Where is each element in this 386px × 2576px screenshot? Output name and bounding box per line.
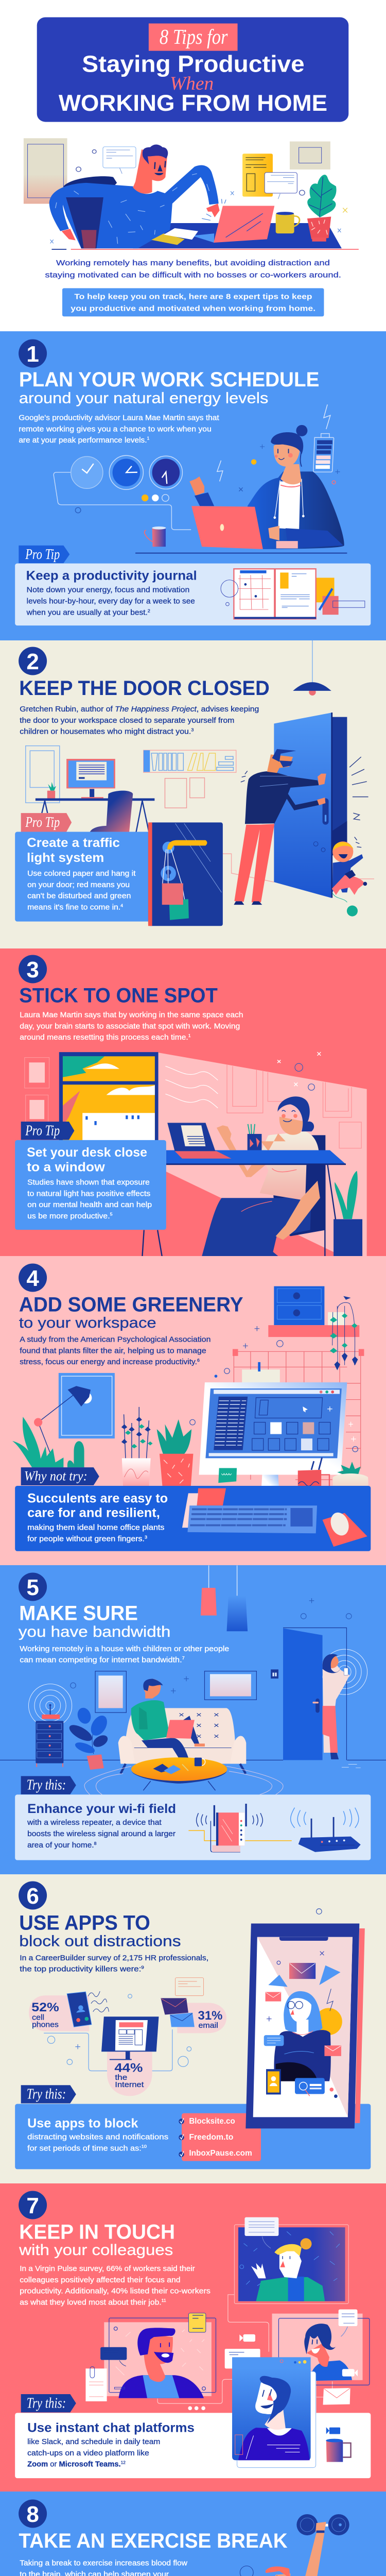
pro tip panel 2 bbox=[15, 813, 223, 926]
stat: cell phones 52%: 52% bbox=[31, 2001, 59, 2014]
tip panel 6: distracting websites and notifications bbox=[27, 2133, 168, 2141]
section 8 bbox=[0, 2492, 386, 2576]
number badge 8 bbox=[19, 2500, 47, 2528]
body text 7 bbox=[20, 2265, 210, 2307]
number badge 4 bbox=[19, 1263, 47, 1292]
body text 8 bbox=[20, 2559, 188, 2576]
flag: pro tip: Pro Tip bbox=[25, 1122, 60, 1139]
tip panel 4: care for and resilient, bbox=[27, 1506, 160, 1520]
pro tip panel 3: on our mental health and can help bbox=[27, 1201, 152, 1209]
body text 7: colleagues positively affected their focus and bbox=[20, 2276, 181, 2284]
number badge 2: 2 bbox=[26, 649, 39, 674]
body text 2: the door to your workspace closed to separate yourself from bbox=[20, 717, 234, 725]
icon: door hanger bbox=[148, 822, 223, 926]
pro tip panel 1 bbox=[15, 546, 371, 625]
section 2 bbox=[0, 640, 386, 948]
tip panel 6: 10 bbox=[142, 2144, 147, 2149]
illustration: computer desk bbox=[199, 1286, 369, 1507]
tip panel 6 bbox=[15, 2085, 371, 2169]
list: blocking apps bbox=[179, 2113, 261, 2161]
illustration: woman at laptop bbox=[135, 404, 347, 554]
subheading 1: around your natural energy levels bbox=[19, 389, 268, 406]
heading 1: PLAN YOUR WORK SCHEDULE bbox=[19, 368, 319, 391]
tip panel 4: making them ideal home office plants bbox=[27, 1524, 165, 1532]
header bbox=[24, 17, 359, 316]
icon: video camera and mug bbox=[326, 2427, 351, 2462]
number badge 1: 1 bbox=[26, 342, 39, 367]
subheading 5: you have bandwidth bbox=[19, 1623, 170, 1640]
number badge 1 bbox=[19, 339, 47, 368]
illustration: clocks and wire bbox=[54, 455, 191, 547]
tip panel 5: 8 bbox=[94, 1841, 97, 1846]
pro tip panel 2: can't be disturbed and green bbox=[27, 892, 131, 901]
number badge 8: 8 bbox=[26, 2502, 39, 2527]
flag: pro tip: Pro Tip bbox=[25, 546, 60, 563]
body text 5: Working remotely in a house with children or other people bbox=[20, 1645, 229, 1653]
flag: try this: Try this: bbox=[27, 1777, 66, 1793]
title panel bbox=[37, 17, 348, 122]
illustration: living room bbox=[0, 1598, 386, 1794]
tip panel 5: Enhance your wi-fi field bbox=[27, 1802, 176, 1816]
body text 3: 1 bbox=[188, 1033, 191, 1038]
tip panel 5: with a wireless repeater, a device that bbox=[27, 1819, 162, 1827]
pro tip panel 1: 2 bbox=[148, 608, 150, 613]
pro tip panel 2: light system bbox=[27, 851, 104, 865]
illustration: man at laptop bbox=[24, 138, 359, 250]
body text 2: Gretchen Rubin, author of The Happiness Project , advises keeping bbox=[20, 705, 259, 714]
stat: cell phones 52% bbox=[29, 1991, 109, 2031]
illustration: man lifting dumbbells bbox=[189, 2514, 349, 2576]
body text 3: Laura Mae Martin says that by working in the same space each bbox=[20, 1011, 243, 1020]
tip panel 7 bbox=[15, 2357, 371, 2478]
list: blocking apps: Blocksite.co bbox=[189, 2117, 235, 2126]
tip panel 5: boosts the wireless signal around a larger bbox=[27, 1830, 176, 1838]
body text 6 bbox=[20, 1954, 208, 1974]
section 7 bbox=[0, 2183, 386, 2492]
tip panel 6: Use apps to block bbox=[27, 2116, 138, 2131]
body text 3: day, your brain starts to associate that spot with work. Moving bbox=[20, 1023, 240, 1031]
tip panel 7: like Slack, and schedule in daily team bbox=[27, 2438, 160, 2446]
body text 5: can mean competing for internet bandwidth. bbox=[20, 1656, 163, 1664]
intro text: staying motivated can be difficult with no bosses or co-workers around. bbox=[45, 271, 341, 279]
tip panel 6: for set periods of time such as: bbox=[27, 2144, 128, 2153]
tip panel 4: for people without green fingers. bbox=[27, 1535, 133, 1544]
body text 7: productivity. Additionally, 40% listed their co-workers bbox=[20, 2287, 210, 2295]
subheading 6: block out distractions bbox=[19, 1933, 181, 1950]
pro tip panel 2: Use colored paper and hang it bbox=[27, 870, 136, 878]
illustration: window and woman at desk bbox=[25, 1052, 367, 1256]
body text 4: 6 bbox=[197, 1358, 200, 1363]
pro tip panel 1: levels hour-by-hour, every day for a week to see bbox=[27, 598, 195, 606]
tip panel 4: 3 bbox=[145, 1535, 148, 1539]
illustration: child and dog bbox=[332, 837, 367, 917]
number badge 3: 3 bbox=[26, 957, 39, 982]
icon: hanging lamp bbox=[293, 640, 331, 696]
heading 4: ADD SOME GREENERY bbox=[19, 1293, 243, 1316]
intro text bbox=[45, 259, 341, 279]
number badge 5 bbox=[19, 1572, 47, 1601]
number badge 6: 6 bbox=[26, 1884, 39, 1909]
pro tip panel 2: Create a traffic bbox=[27, 836, 120, 850]
illustration: blonde colleague video tile bbox=[234, 2217, 348, 2303]
body text 6: 9 bbox=[141, 1965, 144, 1970]
section 5 bbox=[0, 1565, 386, 1874]
body text 2: 3 bbox=[191, 727, 194, 732]
stat: cell phones 52%: cell bbox=[32, 2013, 44, 2022]
subheading 7: with your colleagues bbox=[19, 2242, 173, 2259]
body text 5: 7 bbox=[182, 1656, 185, 1660]
body text 3 bbox=[20, 1011, 243, 1042]
flag: why not try: Why not try: bbox=[24, 1468, 87, 1483]
icon: wi-fi repeater bbox=[188, 1804, 292, 1852]
pro tip panel 3: to a window bbox=[27, 1160, 105, 1175]
flag: try this: Try this: bbox=[27, 2395, 66, 2411]
icon: notebook bbox=[221, 569, 365, 619]
title panel: Staying Productive bbox=[82, 50, 305, 77]
heading 8: TAKE AN EXERCISE BREAK bbox=[19, 2530, 288, 2552]
illustration: colleague on tablet bbox=[232, 2357, 316, 2468]
pro tip panel 1: Note down your energy, focus and motivation bbox=[27, 586, 189, 595]
body text 3: around means resetting this process each time. bbox=[20, 1033, 174, 1042]
number badge 7 bbox=[19, 2191, 47, 2219]
tip panel 5: area of your home. bbox=[27, 1841, 89, 1850]
body text 8: Taking a break to exercise increases blood flow bbox=[20, 2559, 188, 2567]
tip panel 7: catch-ups on a video platform like bbox=[27, 2449, 149, 2458]
pro tip panel 1: when you are usually at your best. bbox=[27, 609, 138, 617]
tip panel 7: Zoom or Microsoft Teams. bbox=[27, 2461, 119, 2469]
stat: cell phones 52%: phones bbox=[32, 2021, 59, 2029]
body text 1: 1 bbox=[147, 436, 150, 441]
title panel: When bbox=[170, 73, 214, 94]
section 6 bbox=[0, 1874, 386, 2183]
stat: internet 44%: 44% bbox=[114, 2061, 143, 2075]
stat: internet 44%: Internet bbox=[115, 2081, 144, 2089]
illustration: phone with woman bbox=[245, 1909, 365, 2128]
tip panel 7: 12 bbox=[121, 2460, 126, 2465]
body text 4 bbox=[20, 1336, 210, 1366]
body text 6: the top productivity killers were: bbox=[20, 1965, 122, 1974]
illustration: hanging lamps bbox=[201, 1565, 248, 1631]
heading 3: STICK TO ONE SPOT bbox=[19, 985, 218, 1007]
pro tip panel 2: 4 bbox=[120, 903, 124, 908]
body text 2 bbox=[20, 705, 259, 736]
intro text: Working remotely has many benefits, but avoiding distraction and bbox=[56, 259, 330, 267]
body text 4: stress, focus our energy and increase productivity. bbox=[20, 1358, 184, 1366]
stat: internet 44%: the bbox=[115, 2074, 127, 2082]
body text 1: are at your peak performance levels. bbox=[19, 436, 138, 445]
section 3 bbox=[0, 948, 386, 1256]
tip panel 5 bbox=[15, 1776, 371, 1860]
pro tip panel 3: us be more productive. bbox=[27, 1212, 102, 1221]
pro tip panel 3: Set your desk close bbox=[27, 1145, 147, 1160]
tip panel 4 bbox=[15, 1467, 371, 1551]
intro callout bbox=[62, 288, 324, 316]
stat: internet 44% bbox=[101, 2016, 159, 2096]
body text 1: remote working gives you a chance to work when you bbox=[19, 425, 212, 433]
pro tip panel 1: Keep a productivity journal bbox=[26, 569, 197, 583]
pro tip panel 2: on your door; red means you bbox=[27, 881, 130, 889]
body text 4: found that plants filter the air, helping us to manage bbox=[20, 1347, 206, 1355]
title panel: 8 Tips for bbox=[160, 25, 228, 48]
list: blocking apps: InboxPause.com bbox=[189, 2149, 252, 2158]
number badge 2 bbox=[19, 647, 47, 675]
heading 7: KEEP IN TOUCH bbox=[19, 2221, 175, 2244]
body text 1 bbox=[19, 414, 219, 445]
number badge 5: 5 bbox=[26, 1575, 39, 1600]
heading 2: KEEP THE DOOR CLOSED bbox=[19, 677, 270, 700]
body text 1: Google's productivity advisor Laura Mae Martin says that bbox=[19, 414, 219, 422]
title panel: WORKING FROM HOME bbox=[59, 90, 327, 116]
illustration: man closing door bbox=[223, 713, 374, 905]
flag: try this: Try this: bbox=[27, 2086, 66, 2103]
body text 5 bbox=[20, 1645, 229, 1664]
intro callout: To help keep you on track, here are 8 expert tips to keep bbox=[74, 293, 312, 301]
illustration: home office desk bbox=[26, 746, 236, 832]
pro tip panel 3: Studies have shown that exposure bbox=[27, 1178, 150, 1187]
heading 6: USE APPS TO bbox=[19, 1911, 150, 1934]
list: blocking apps: Freedom.to bbox=[189, 2133, 233, 2142]
section 1 bbox=[0, 331, 386, 640]
illustration: video call collage bbox=[85, 2295, 370, 2413]
body text 7: as what they loved most about their job. bbox=[20, 2298, 150, 2307]
flag: pro tip: Pro Tip bbox=[25, 814, 60, 831]
body text 6: In a CareerBuilder survey of 2,175 HR professionals, bbox=[20, 1954, 208, 1962]
stat: email 31%: 31% bbox=[198, 2009, 222, 2023]
number badge 6 bbox=[19, 1882, 47, 1909]
stat: email 31% bbox=[161, 1978, 226, 2033]
number badge 3 bbox=[19, 955, 47, 983]
subheading 4: to your workspace bbox=[19, 1315, 156, 1331]
pro tip panel 2: means it's fine to come in. bbox=[27, 904, 112, 912]
chart: productivity killers bbox=[29, 1978, 226, 2096]
number badge 4: 4 bbox=[26, 1266, 39, 1291]
intro callout: you productive and motivated when working from home. bbox=[71, 304, 315, 313]
number badge 7: 7 bbox=[26, 2193, 39, 2218]
body text 7: 11 bbox=[162, 2298, 166, 2303]
tip panel 7: Use instant chat platforms bbox=[27, 2421, 195, 2435]
pro tip panel 3 bbox=[15, 1122, 166, 1230]
stat: email 31%: email bbox=[199, 2022, 218, 2030]
section 4 bbox=[0, 1256, 386, 1565]
icon: keyboard, papers and mouse bbox=[182, 1488, 367, 1547]
heading 5: MAKE SURE bbox=[19, 1602, 138, 1625]
icon: wi-fi router bbox=[291, 1808, 361, 1852]
body text 4: A study from the American Psychological Association bbox=[20, 1336, 210, 1344]
pro tip panel 3: 5 bbox=[110, 1212, 113, 1217]
body text 7: In a Virgin Pulse survey, 66% of workers said their bbox=[20, 2265, 195, 2273]
tip panel 4: Succulents are easy to bbox=[27, 1491, 168, 1505]
pro tip panel 3: to natural light has positive effects bbox=[27, 1190, 150, 1198]
body text 2: children or housemates who might distract you. bbox=[20, 728, 174, 736]
illustration: lamp and plants bbox=[12, 1373, 195, 1487]
